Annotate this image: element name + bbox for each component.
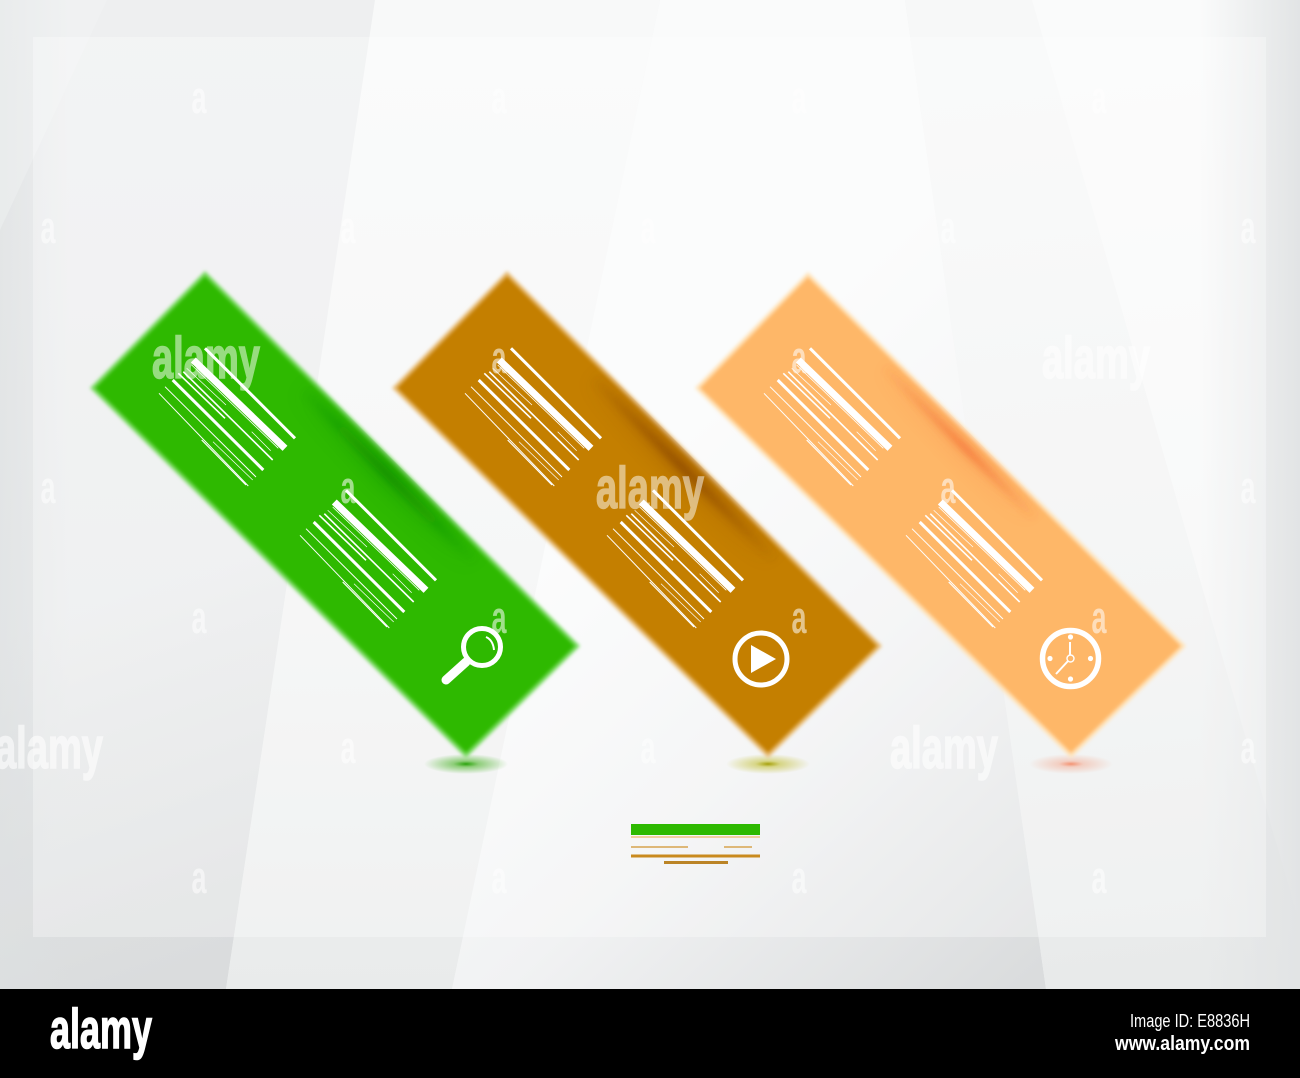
watermark pattern: a <box>1092 852 1107 903</box>
banner shape: green <box>90 271 580 758</box>
watermark: alamy logos: alamy <box>1042 326 1150 391</box>
watermark pattern: a <box>940 462 956 513</box>
watermark: alamy logos: alamy <box>890 716 998 781</box>
text lines: orange lower <box>906 490 1042 628</box>
text lines: orange upper <box>764 348 900 486</box>
text lines: green lower <box>300 490 436 628</box>
tip shadow: olive <box>726 754 810 774</box>
watermark: alamy logos: alamy <box>152 326 260 391</box>
watermark pattern: a <box>492 852 507 903</box>
banner shape: brown <box>392 271 882 758</box>
watermark pattern: a <box>792 72 807 123</box>
legend lines <box>631 824 760 864</box>
footer url: www.alamy.com <box>1114 1033 1250 1055</box>
watermark pattern: a <box>40 462 56 513</box>
watermark pattern: a <box>340 462 356 513</box>
footer logo: alamy <box>50 997 152 1060</box>
watermark pattern: a <box>340 202 356 253</box>
text lines: green upper <box>159 348 295 486</box>
watermark pattern: a <box>40 202 56 253</box>
panel: green banner <box>90 271 580 774</box>
footer image id: Image ID: E8836H <box>1130 1011 1250 1031</box>
tip shadow: red <box>1029 754 1113 774</box>
watermark pattern: a <box>1092 72 1107 123</box>
watermark pattern: a <box>192 592 207 643</box>
watermark pattern: a <box>1240 462 1256 513</box>
watermark pattern <box>40 72 1256 903</box>
tip shadow: green <box>424 754 508 774</box>
icon: play button <box>735 633 787 685</box>
watermark pattern: a <box>792 852 807 903</box>
watermark pattern: a <box>940 202 956 253</box>
panel: orange banner <box>695 272 1186 774</box>
watermark pattern: a <box>640 202 656 253</box>
watermark pattern: a <box>792 332 807 383</box>
watermark pattern: a <box>192 852 207 903</box>
watermark: alamy logos: alamy <box>596 456 704 521</box>
icon: clock <box>1042 630 1098 686</box>
watermark: alamy logos <box>0 326 1150 781</box>
watermark pattern: a <box>1240 722 1256 773</box>
watermark pattern: a <box>792 592 807 643</box>
footer bar <box>0 989 1300 1078</box>
banner shape: orange <box>695 272 1186 758</box>
text lines: brown upper <box>465 348 601 486</box>
watermark pattern: a <box>640 722 656 773</box>
watermark pattern: a <box>1240 202 1256 253</box>
watermark pattern: a <box>492 332 507 383</box>
watermark pattern: a <box>192 72 207 123</box>
icon: magnifying glass <box>446 628 500 680</box>
text lines: brown lower <box>607 490 743 628</box>
panel: brown banner <box>392 271 882 774</box>
watermark pattern: a <box>1092 592 1107 643</box>
watermark pattern: a <box>492 592 507 643</box>
watermark pattern: a <box>492 72 507 123</box>
watermark pattern: a <box>340 722 356 773</box>
